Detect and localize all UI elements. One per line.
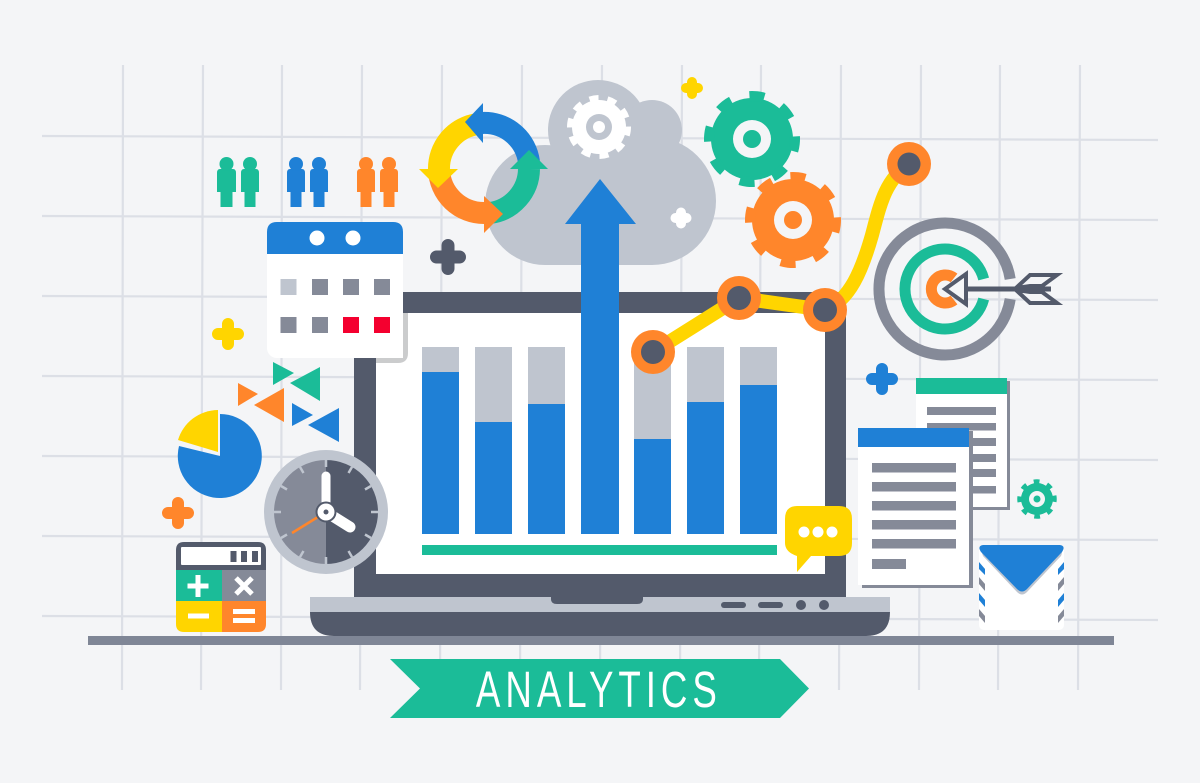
calendar [267, 222, 408, 363]
arrow: growth [565, 179, 636, 534]
icon: yellow plus left [218, 324, 238, 344]
banner [390, 659, 809, 718]
pie chart [178, 410, 262, 498]
icon: cloud gear [566, 94, 632, 160]
icon: cloud plus [676, 212, 686, 224]
speech bubble [785, 506, 852, 572]
line chart [631, 142, 931, 374]
laptop [310, 292, 890, 636]
document back [916, 378, 1010, 510]
icon: small green gear [1020, 482, 1054, 516]
icon: green gear [704, 91, 800, 187]
envelope [979, 545, 1064, 630]
clock [264, 450, 388, 574]
icon: yellow plus top [686, 82, 698, 94]
arrow [945, 274, 1057, 304]
cloud [485, 80, 716, 265]
people icons [217, 157, 398, 207]
laptop base [310, 597, 890, 636]
icon: orange plus [168, 503, 188, 523]
stacked bar chart [422, 347, 777, 555]
icon: cycle arrows [419, 103, 548, 233]
document front [858, 428, 973, 588]
icon: blue plus [872, 369, 892, 389]
target with arrow [879, 223, 1057, 355]
laptop screen frame [354, 292, 846, 600]
shelf [88, 636, 1114, 645]
icon: dark plus [436, 246, 460, 268]
triangles [238, 362, 339, 442]
calculator [176, 542, 266, 632]
icon: orange gear [745, 172, 841, 268]
banner title: ANALYTICS [476, 662, 717, 718]
